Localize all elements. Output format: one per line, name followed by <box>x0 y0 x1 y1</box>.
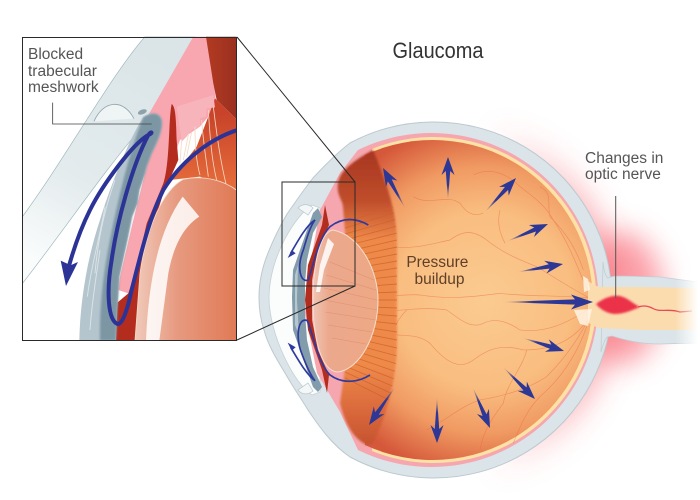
anterior chamber <box>269 205 320 395</box>
yellow retina layer <box>372 137 596 463</box>
inset: limbal bump <box>94 104 134 121</box>
inset: red ciliary body <box>115 104 178 340</box>
inset: flow arrowhead <box>61 261 78 286</box>
pressure arrows <box>364 157 593 443</box>
inset: label: trabecular <box>28 63 97 80</box>
blood vessels <box>347 171 593 450</box>
label: pressure buildup: buildup <box>414 271 464 288</box>
inset: blue flow path <box>68 130 237 324</box>
inset: zonule fibres <box>180 107 227 187</box>
glow: redness around back of the eye <box>246 114 664 486</box>
pink choroid layer <box>305 133 598 467</box>
inset: label: Blocked <box>28 46 83 63</box>
inset: panel border <box>22 38 236 340</box>
inset: lens highlight <box>146 197 199 341</box>
limbal bumps <box>298 205 313 394</box>
inset: iris streaks <box>87 180 115 330</box>
vitreous interior <box>365 140 593 460</box>
inset: cornea band <box>20 37 195 287</box>
label: changes in optic nerve: Changes in <box>585 150 663 167</box>
zoom box on eye and connector lines <box>237 37 355 340</box>
inset: iris <box>79 114 162 341</box>
white patches at optic disc <box>574 276 592 326</box>
inset: orange ciliary muscle <box>172 98 236 190</box>
title: Glaucoma <box>392 38 484 63</box>
label: changes in optic nerve <box>585 150 668 298</box>
inset panel: blocked trabecular meshwork detail <box>20 37 237 341</box>
inset: lens <box>135 178 237 341</box>
inset: Schlemm canal <box>138 109 147 115</box>
red ciliary body <box>305 205 329 393</box>
inset: speckled pink tissue edge <box>177 95 215 142</box>
ciliary muscle <box>338 150 397 445</box>
inset: leader line <box>53 103 152 124</box>
inset: dark iris band <box>100 114 162 341</box>
inset: label: meshwork <box>28 79 99 96</box>
iris <box>292 208 322 392</box>
inset: dark red upper muscle <box>206 37 237 120</box>
eyeball outer wall: sclera and cornea <box>259 122 612 478</box>
lens <box>313 230 378 372</box>
label: pressure buildup: Pressure <box>406 254 468 271</box>
optic nerve <box>588 262 700 352</box>
label: changes in optic nerve: optic nerve <box>585 166 661 183</box>
blue aqueous flow arrows, main eye <box>288 220 370 381</box>
inset: pink tissue <box>118 37 217 293</box>
